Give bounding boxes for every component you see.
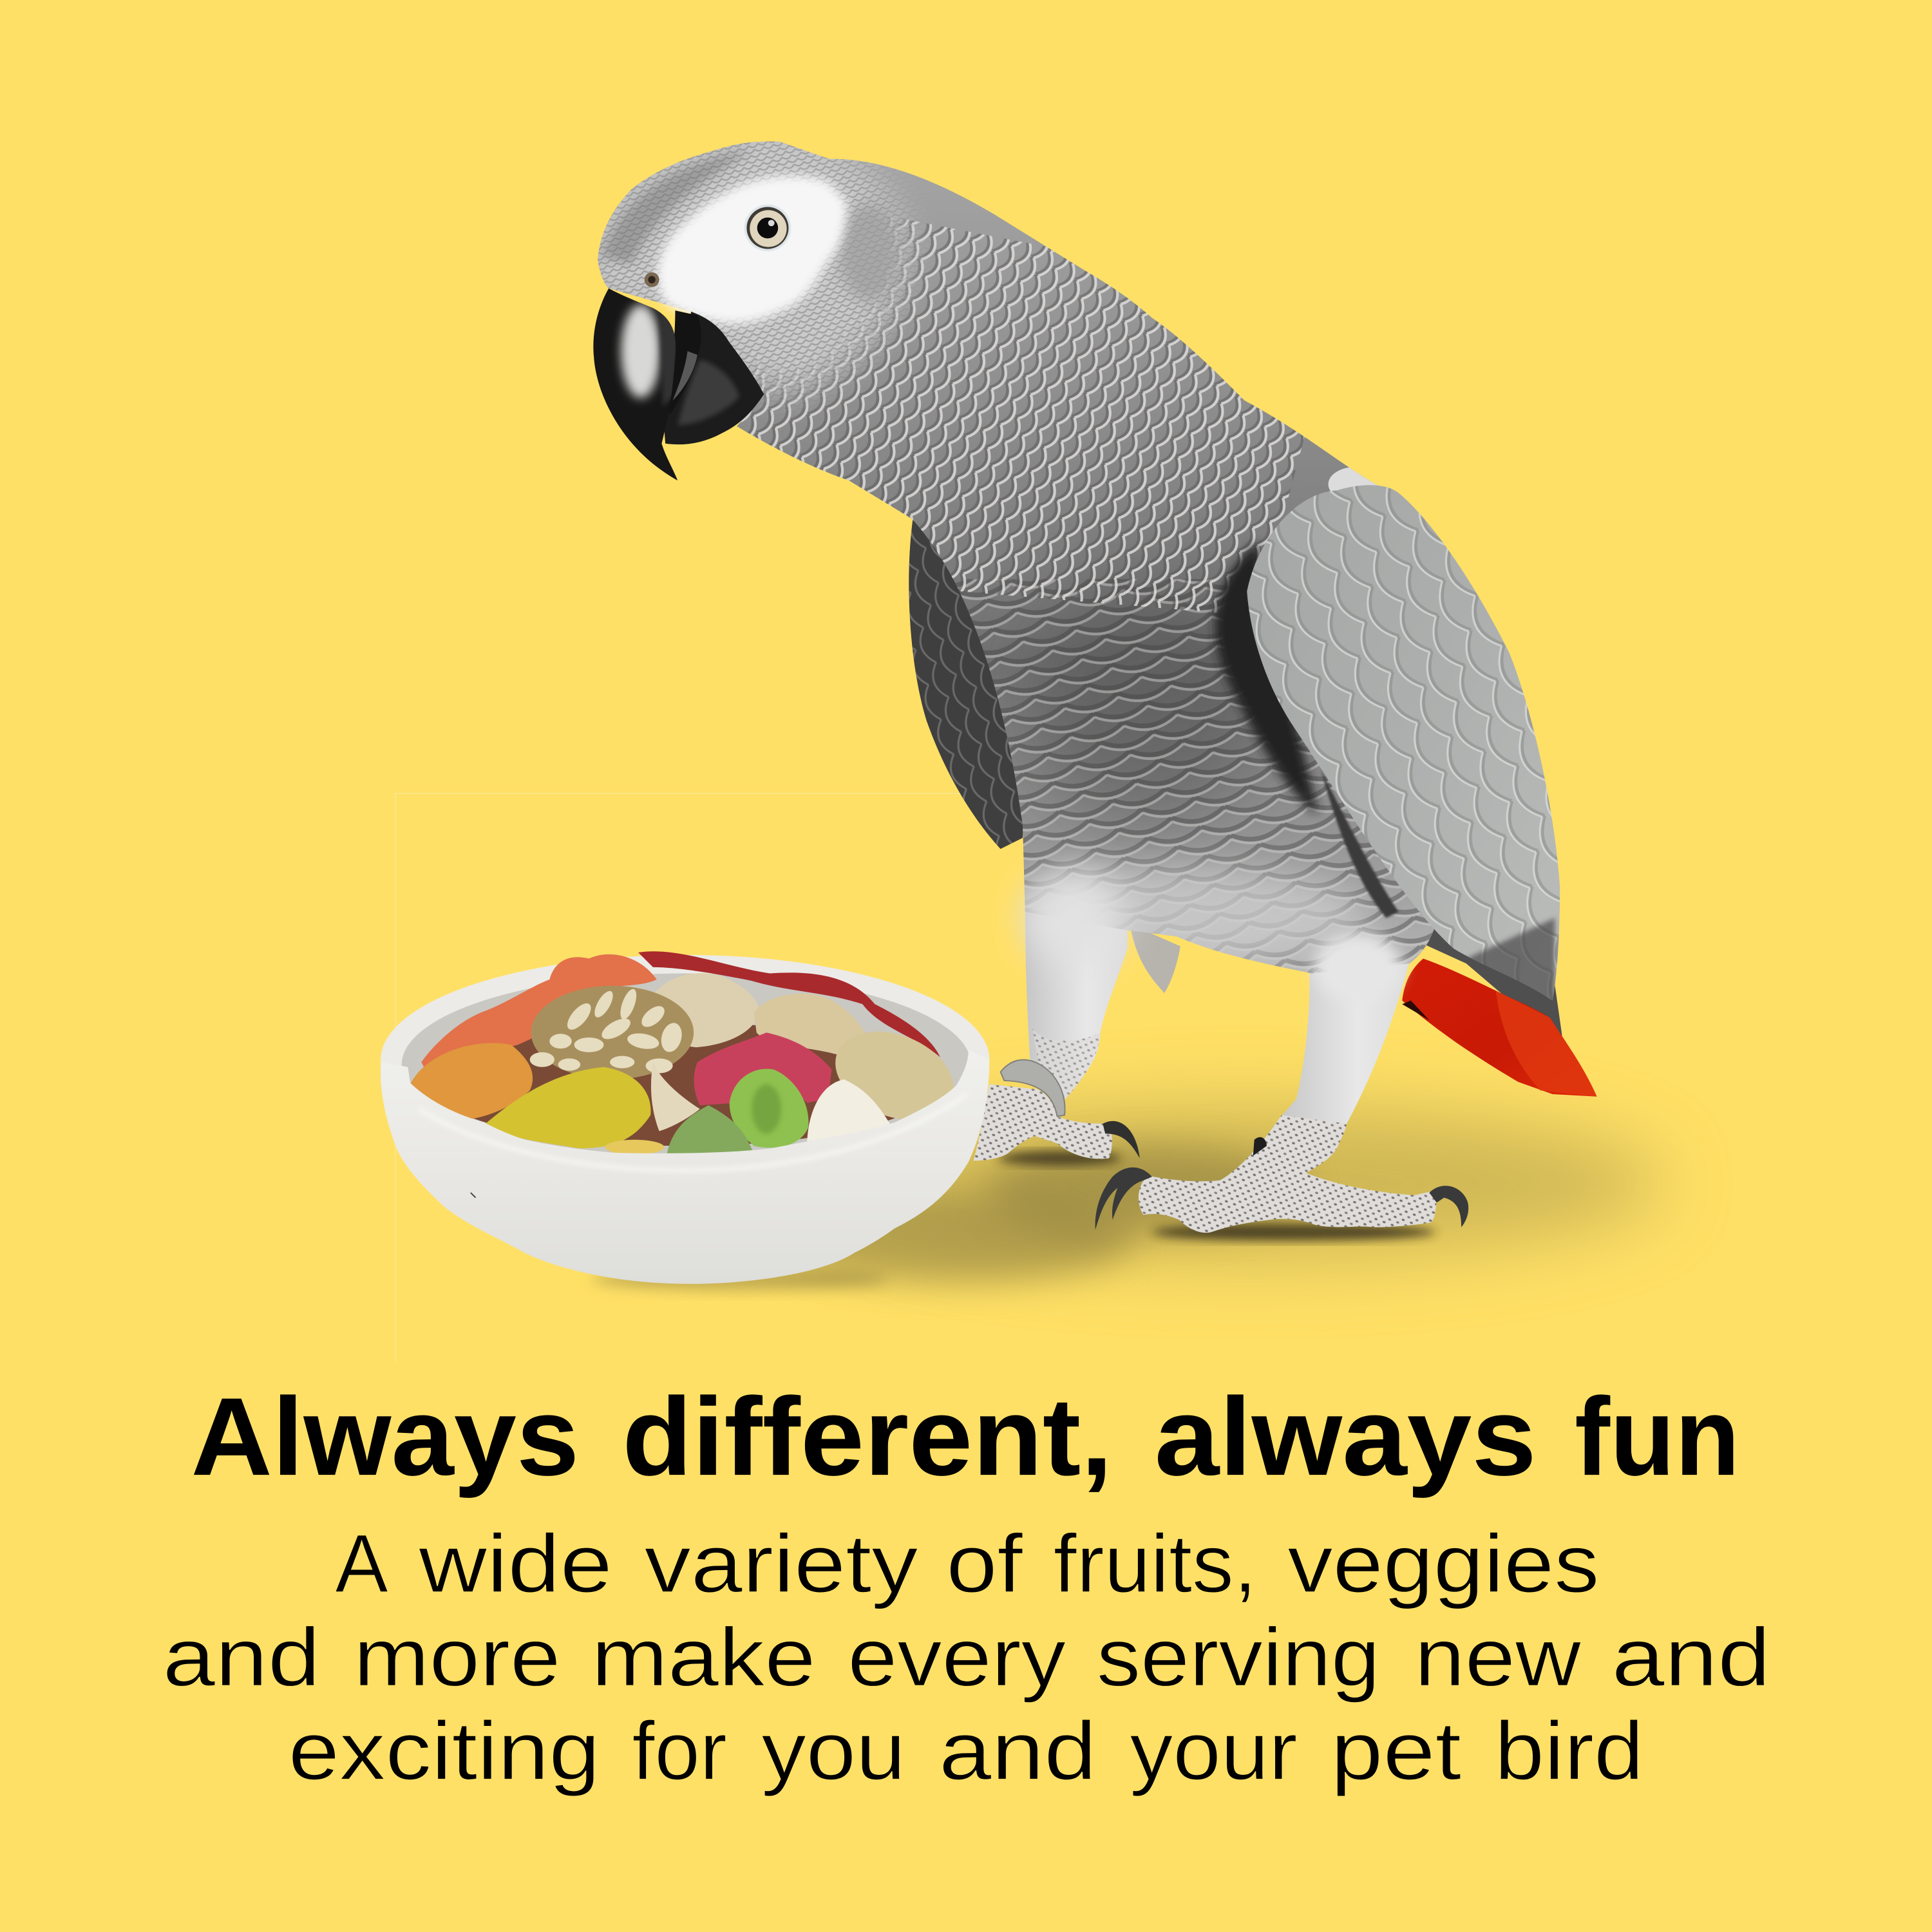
right foot: toes <box>1139 1115 1437 1233</box>
food: corn <box>605 1140 664 1155</box>
body line 3: and <box>939 1705 1097 1797</box>
wing: under feather dark stripe <box>1321 770 1399 918</box>
parrot: beak <box>585 277 764 487</box>
food: beige piece three <box>822 1015 967 1137</box>
body line 1: veggies <box>1287 1518 1599 1610</box>
body: scale texture lower <box>956 579 1433 974</box>
food: beige piece one <box>647 973 759 1047</box>
headline <box>191 1375 1740 1499</box>
parrot: right foot <box>1095 1115 1468 1233</box>
beak: mouth inner <box>663 310 701 414</box>
beak: upper mandible <box>585 277 690 487</box>
head: neck shading behind face <box>839 204 898 302</box>
food: green floret <box>667 1105 754 1156</box>
parrot: near wing <box>1247 485 1560 1001</box>
food: orange puff <box>410 1043 533 1120</box>
parrot: left foot with ring <box>973 1029 1140 1160</box>
shoulder: pale patch <box>1328 468 1378 491</box>
right foot: back toe claw <box>1253 1137 1267 1156</box>
bowl: front wall <box>381 1050 989 1284</box>
head: light crown <box>598 142 925 411</box>
food: yellow puff <box>486 1067 651 1148</box>
headline: different, <box>622 1375 1113 1499</box>
parrot: tail dark feathers <box>1380 862 1562 1037</box>
parrot: nostril <box>645 272 659 287</box>
body: lower belly lightening <box>998 869 1368 967</box>
parrot: red tail <box>1402 959 1597 1097</box>
parrot: body and head feathers <box>598 142 1434 974</box>
body line 3: bird <box>1495 1705 1643 1797</box>
food: green ring <box>730 1069 808 1148</box>
body line 3: exciting <box>289 1705 600 1797</box>
body line 3: you <box>761 1705 905 1797</box>
body: scale texture neck <box>727 185 1306 616</box>
parrot <box>542 99 1597 1233</box>
faint image edge lines <box>395 793 1023 1361</box>
body line 2: more <box>354 1611 561 1703</box>
food: chip <box>651 1062 700 1131</box>
body line 1: variety <box>645 1518 918 1610</box>
food: beige piece two <box>754 994 870 1055</box>
body line 2: every <box>848 1611 1066 1703</box>
parrot: left leg <box>1025 900 1128 1099</box>
parrot: dark gap between body and wing <box>1215 542 1318 813</box>
food: carrot strip <box>421 954 657 1070</box>
body line 3 <box>289 1705 1643 1797</box>
left foot: metal ring <box>1001 1060 1065 1116</box>
bowl: small speck <box>471 1193 476 1198</box>
right foot: rear claw <box>1429 1186 1468 1227</box>
parrot: eye <box>744 205 791 251</box>
food: red chili <box>638 951 940 1057</box>
food: red cube <box>694 1032 831 1105</box>
parrot: right leg <box>1279 949 1410 1124</box>
food: white cauliflower <box>807 1079 892 1146</box>
body line 3: your <box>1130 1705 1298 1797</box>
parrot: thigh whites <box>1025 871 1402 1001</box>
head: top crown shading <box>601 150 752 265</box>
body line 2: and <box>1612 1611 1770 1703</box>
body line 2: make <box>591 1611 816 1703</box>
left foot: claw <box>1103 1121 1140 1158</box>
headline: fun <box>1575 1375 1740 1499</box>
body line 2: new <box>1414 1611 1581 1703</box>
right foot: front claw <box>1095 1168 1152 1229</box>
headline: Always <box>191 1375 579 1499</box>
body line 2: serving <box>1097 1611 1380 1703</box>
body: chest shading <box>1029 579 1263 826</box>
head: white face patch <box>657 176 847 324</box>
body line 1: wide <box>418 1518 612 1610</box>
headline: always <box>1155 1375 1537 1499</box>
body line 2: and <box>163 1611 320 1703</box>
left foot: scaled shin <box>1032 1029 1101 1099</box>
body line 1 <box>335 1518 1599 1610</box>
bowl: rim highlight <box>419 1094 967 1171</box>
left foot: toes <box>973 1084 1112 1160</box>
beak: lower mandible <box>663 312 764 444</box>
food bowl <box>381 951 989 1284</box>
body line 1: of <box>946 1518 1023 1610</box>
parrot: thigh tuft <box>1130 924 1180 993</box>
body line 3: for <box>632 1705 727 1797</box>
body line 1: fruits, <box>1054 1518 1257 1610</box>
body copy <box>163 1518 1770 1797</box>
body line 3: pet <box>1331 1705 1461 1797</box>
food: shaded base <box>431 1023 936 1146</box>
parrot: far dark wing <box>909 518 1025 849</box>
ground shadow <box>591 1106 1663 1290</box>
bowl: back and interior <box>381 955 989 1164</box>
body line 2 <box>163 1611 1770 1703</box>
body line 1: A <box>335 1518 388 1610</box>
food: seed cluster <box>530 986 694 1079</box>
wing: tip shadow <box>1466 918 1555 1023</box>
